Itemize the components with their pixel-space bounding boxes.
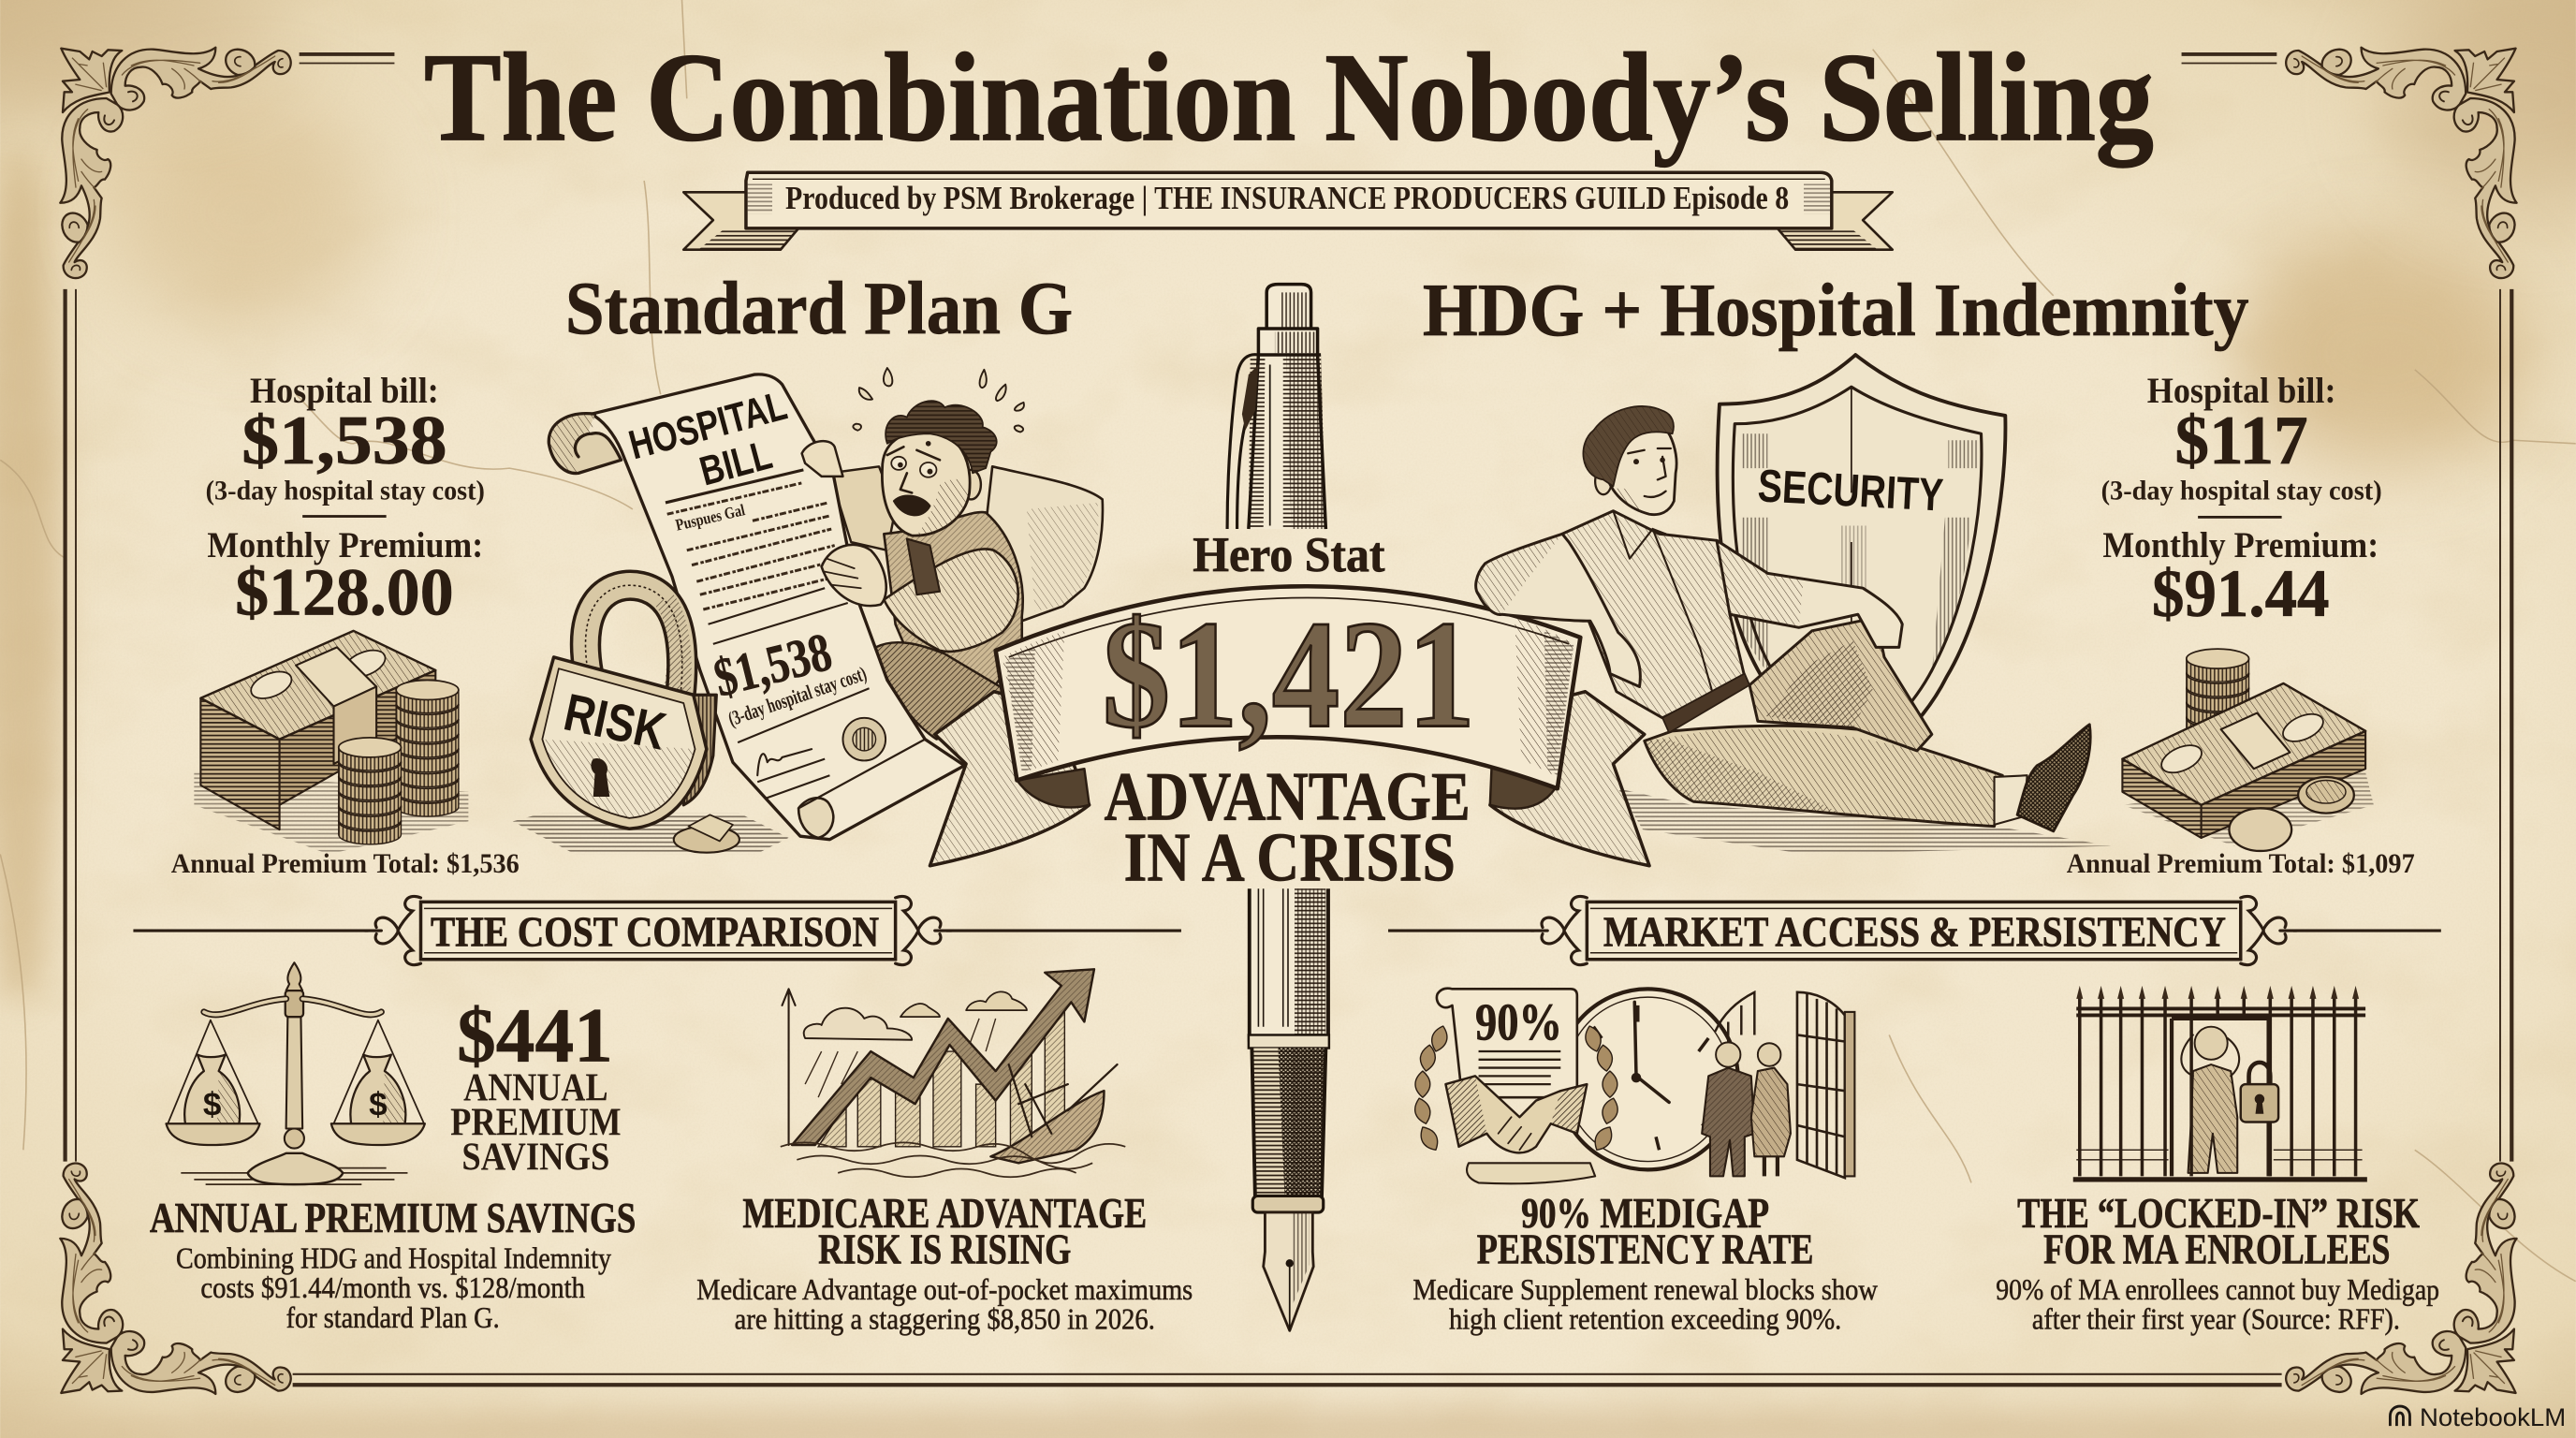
- top-right corner ornament: [2286, 48, 2517, 278]
- left stats: Standard Plan G: Monthly Premium:: [207, 526, 483, 565]
- fence spikes: [2076, 986, 2359, 999]
- belt: [1662, 673, 1749, 733]
- right stats: HDG + Hospital Indemnity: $117: [2175, 402, 2308, 478]
- illustration: relaxed man leaning on banner: [1476, 406, 2111, 854]
- waves: [781, 1142, 1125, 1177]
- heading: Standard Plan G: Standard Plan G: [565, 267, 1073, 350]
- sock: [1995, 775, 2027, 825]
- icon: hands gripping bill: [802, 441, 886, 606]
- vest body: [884, 512, 1023, 698]
- right stats: HDG + Hospital Indemnity: [2101, 372, 2382, 631]
- icon: balance scale with money bags: [167, 962, 425, 1184]
- certificate with 90 percent: [1437, 989, 1577, 1097]
- description: Medicare Advantage out-of-pocket maximums: [696, 1273, 1193, 1306]
- description: [176, 1242, 611, 1334]
- couple: [1702, 1068, 1754, 1176]
- savings amount: $441: [457, 993, 613, 1078]
- section header: market access and persistency: [1388, 896, 2441, 965]
- heading: medicare advantage risk: RISK IS RISING: [818, 1225, 1071, 1272]
- handshake: [1445, 1076, 1587, 1152]
- right stats: HDG + Hospital Indemnity: $91.44: [2152, 556, 2329, 631]
- description: Medicare Supplement renewal blocks show: [1412, 1273, 1878, 1306]
- bottom-right corner ornament: [2286, 1164, 2517, 1394]
- hero label: Hero Stat: [1193, 528, 1385, 582]
- pillow: [986, 466, 1103, 621]
- right stats: HDG + Hospital Indemnity: Monthly Premium:: [2102, 526, 2378, 565]
- hero stat number: $1,421: [1103, 589, 1475, 760]
- icon: scroll, handshake, clock, couple and gate: 90%: [1475, 994, 1562, 1052]
- heading: annual premium savings: ANNUAL PREMIUM SAVINGS: [150, 1194, 636, 1241]
- left stats: Standard Plan G: $1,538: [242, 402, 447, 478]
- section header: the cost comparison: [133, 896, 1181, 965]
- illustration: hospital bill scroll: (3-day hospital stay cost): [725, 661, 870, 730]
- left stats: Standard Plan G: Hospital bill:: [250, 372, 439, 411]
- annual premium total: right: Annual Premium Total: $1,097: [2067, 848, 2415, 879]
- description: [1412, 1273, 1878, 1336]
- sleeve: [884, 549, 1018, 652]
- right stats: HDG + Hospital Indemnity: (3-day hospital stay cost): [2101, 475, 2382, 506]
- description: 90% of MA enrollees cannot buy Medigap: [1996, 1273, 2439, 1306]
- description: after their first year (Source: RFF).: [2032, 1303, 2400, 1336]
- illustration: hospital bill scroll: $1,538: [708, 621, 838, 709]
- heading: medicare advantage risk: [742, 1189, 1147, 1272]
- left stats: Standard Plan G: $128.00: [235, 554, 454, 629]
- description: are hitting a staggering $8,850 in 2026.: [735, 1303, 1155, 1336]
- icon: large pile of money and coins: [194, 631, 468, 854]
- padlock: [2241, 1063, 2278, 1122]
- icon: risk padlock: RISK: [559, 682, 671, 761]
- bars: [818, 1010, 1064, 1147]
- description: [1996, 1273, 2439, 1336]
- trapped man: [2181, 1027, 2239, 1173]
- right stats: HDG + Hospital Indemnity: Hospital bill:: [2147, 372, 2336, 411]
- panel: locked-in risk: [1996, 986, 2439, 1336]
- hero caption: [1104, 758, 1471, 896]
- heading: medigap persistency: 90% MEDIGAP: [1521, 1189, 1769, 1237]
- collar and tie: [907, 539, 940, 594]
- savings caption: PREMIUM: [450, 1101, 622, 1145]
- gate: [1715, 992, 1754, 1041]
- knee: [876, 642, 1005, 740]
- panel: medicare advantage risk: [696, 969, 1193, 1336]
- facial features: [887, 441, 940, 515]
- icon: rising chart with sinking ship: [781, 969, 1125, 1177]
- heading: medigap persistency: PERSISTENCY RATE: [1477, 1225, 1814, 1272]
- fence: [2073, 997, 2367, 1180]
- arm on banner: [1476, 534, 1640, 686]
- savings caption: SAVINGS: [461, 1135, 609, 1179]
- head: [1583, 406, 1676, 515]
- bent leg: [1749, 618, 1932, 751]
- ear: [961, 470, 981, 499]
- NotebookLM watermark: NotebookLM: [2420, 1402, 2566, 1431]
- title: The Combination Nobody’s Selling: [424, 28, 2154, 168]
- face: [882, 431, 970, 536]
- pen cap and barrel: [1227, 285, 1325, 529]
- illustration: fountain pen: [1227, 285, 1329, 1330]
- illustration: hospital bill scroll: [549, 374, 964, 840]
- heading: HDG + Hospital Indemnity: HDG + Hospital Indemnity: [1423, 269, 2249, 352]
- illustration: hospital bill scroll: HOSPITAL: [624, 383, 792, 468]
- icon: man behind locked iron gate: [2073, 986, 2367, 1180]
- section header: the cost comparison: THE COST COMPARISON: [431, 908, 879, 956]
- rising arrow: [792, 969, 1094, 1145]
- heading: locked-in risk: [2017, 1189, 2420, 1272]
- heading: medicare advantage risk: MEDICARE ADVANTAGE: [742, 1189, 1147, 1237]
- heading: medigap persistency: [1477, 1189, 1814, 1272]
- description: Combining HDG and Hospital Indemnity: [176, 1242, 611, 1275]
- icon: balance scale with money bags: $: [203, 1086, 222, 1123]
- illustration: worried man with pillow: [829, 368, 1103, 740]
- straight leg: [1645, 726, 2002, 827]
- illustration: security shield: SECURITY: [1757, 461, 1944, 521]
- raised sleeve: [829, 466, 896, 550]
- subtitle ribbon: Produced by PSM Brokerage | THE INSURANCE PRODUCERS GUILD Episode 8: [785, 180, 1789, 216]
- left stats: Standard Plan G: [206, 372, 485, 629]
- clouds: [804, 1008, 912, 1040]
- clock: [1558, 989, 1738, 1169]
- description: for standard Plan G.: [286, 1301, 500, 1334]
- section header: market access and persistency: MARKET ACCESS & PERSISTENCY: [1603, 908, 2226, 956]
- annual premium total: left: Annual Premium Total: $1,536: [171, 848, 520, 879]
- illustration: hospital bill scroll: Puspues Gal: [674, 500, 747, 535]
- illustration: security shield: [1718, 355, 2005, 775]
- savings caption: ANNUAL: [463, 1066, 608, 1110]
- shoe: [2017, 725, 2090, 831]
- heading: locked-in risk: FOR MA ENROLLEES: [2043, 1225, 2390, 1272]
- laurels: [1412, 1024, 1620, 1153]
- hair: [886, 401, 997, 473]
- subtitle ribbon: [683, 172, 1893, 250]
- pen nib: [1264, 1212, 1313, 1330]
- description: [696, 1273, 1193, 1336]
- sinking ship: [990, 1091, 1104, 1163]
- icon: smaller money and coins: [2122, 649, 2374, 851]
- illustration: hospital bill scroll: BILL: [695, 432, 777, 495]
- hero caption: ADVANTAGE: [1104, 758, 1471, 835]
- hero caption: IN A CRISIS: [1124, 819, 1456, 896]
- pen grip: [1251, 1049, 1325, 1212]
- savings caption: [450, 1066, 622, 1179]
- panel: medigap persistency: [1412, 989, 1878, 1336]
- pen barrel lower: [1249, 888, 1329, 1049]
- top-left corner ornament: [60, 48, 291, 278]
- icon: balance scale with money bags: $: [369, 1086, 388, 1123]
- description: costs $91.44/month vs. $128/month: [200, 1271, 585, 1304]
- panel: annual premium savings: [150, 962, 636, 1334]
- icon: scroll, handshake, clock, couple and gate: [1412, 989, 1854, 1183]
- icon: risk padlock: [513, 585, 789, 854]
- left stats: Standard Plan G: (3-day hospital stay cost): [206, 475, 485, 506]
- heading: locked-in risk: THE “LOCKED-IN” RISK: [2017, 1189, 2420, 1237]
- bottom-left corner ornament: [60, 1164, 291, 1394]
- description: high client retention exceeding 90%.: [1449, 1303, 1841, 1336]
- hero ribbon banner: [929, 586, 1649, 866]
- torso: [1562, 511, 1767, 718]
- icon: sweat drops: [853, 368, 1024, 432]
- arm on knee: [1717, 540, 1902, 647]
